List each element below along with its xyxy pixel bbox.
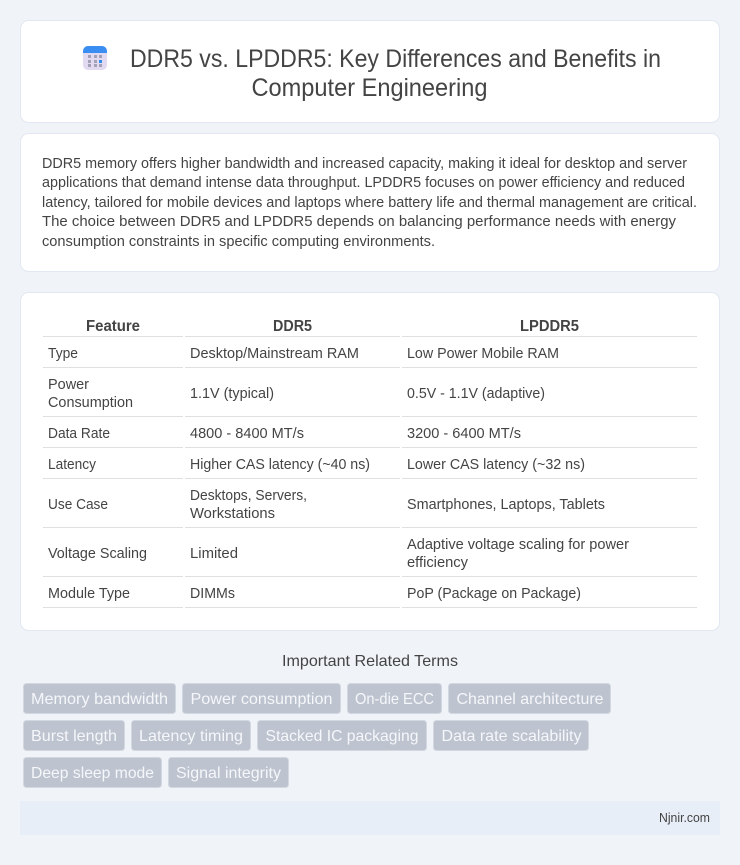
table rows: Higher CAS latency (~40 ns) bbox=[190, 457, 370, 473]
tags: related terms: Signal integrity bbox=[176, 765, 281, 782]
tags: related terms: Memory bandwidth bbox=[31, 691, 168, 708]
table header: LPDDR5 bbox=[520, 318, 579, 335]
text block: summary: applications that demand intense data throughput. LPDDR5 focuses on power efficiency and reduced bbox=[42, 175, 685, 191]
table rows: 0.5V - 1.1V (adaptive) bbox=[407, 386, 545, 402]
tags: related terms: Channel architecture bbox=[456, 691, 604, 708]
table rows: 3200 - 6400 MT/s bbox=[407, 426, 521, 442]
table rows: Type bbox=[48, 346, 78, 362]
table rows: PoP (Package on Package) bbox=[407, 586, 581, 602]
title: DDR5 vs. LPDDR5: Key Differences and Benefits in bbox=[130, 45, 661, 73]
table rows: Power bbox=[48, 377, 89, 393]
footer bbox=[20, 801, 720, 835]
text block: summary bbox=[42, 156, 697, 250]
icon: calendar bbox=[83, 46, 107, 70]
table rows: Low Power Mobile RAM bbox=[407, 346, 559, 362]
tags: related terms: On-die ECC bbox=[355, 691, 434, 708]
panel: comparison table bbox=[20, 292, 720, 630]
text block: summary: latency, tailored for mobile devices and laptops where battery life and thermal management are critical. bbox=[42, 195, 697, 211]
table rows: 4800 - 8400 MT/s bbox=[190, 426, 304, 442]
text block: summary: DDR5 memory offers higher bandwidth and increased capacity, making it ideal for desktop and server bbox=[42, 156, 687, 172]
table rows: efficiency bbox=[407, 555, 469, 571]
table rows: Module Type bbox=[48, 586, 130, 602]
panel: header bbox=[20, 20, 720, 122]
tags: related terms bbox=[24, 684, 610, 788]
table rows: Use Case bbox=[48, 497, 108, 513]
tags: related terms: Data rate scalability bbox=[442, 728, 582, 745]
table rows: Workstations bbox=[190, 506, 275, 522]
footer: Njnir.com bbox=[659, 811, 710, 825]
table rows: Limited bbox=[190, 546, 238, 562]
table header: Feature bbox=[86, 318, 140, 335]
table rows: DIMMs bbox=[190, 586, 235, 602]
table rows: Voltage Scaling bbox=[48, 546, 147, 562]
table header: DDR5 bbox=[273, 318, 312, 335]
title bbox=[130, 45, 661, 102]
tags: related terms: Latency timing bbox=[139, 728, 243, 745]
text block: summary: The choice between DDR5 and LPDDR5 depends on balancing performance needs with energy bbox=[42, 214, 677, 230]
table rows: Desktop/Mainstream RAM bbox=[190, 346, 359, 362]
table rows: 1.1V (typical) bbox=[190, 386, 274, 402]
table rows: Smartphones, Laptops, Tablets bbox=[407, 497, 605, 513]
title: Computer Engineering bbox=[252, 74, 488, 102]
table header bbox=[86, 318, 579, 335]
tags: related terms: Stacked IC packaging bbox=[266, 728, 418, 745]
tags: related terms: Power consumption bbox=[190, 691, 332, 708]
text block: summary: consumption constraints in specific computing environments. bbox=[42, 234, 435, 250]
tags: related terms: Deep sleep mode bbox=[31, 765, 154, 782]
tags: related terms: Burst length bbox=[31, 728, 117, 745]
heading: related terms: Important Related Terms bbox=[282, 653, 458, 670]
table rows: Consumption bbox=[48, 395, 133, 411]
table rows bbox=[48, 346, 629, 602]
table rows: Data Rate bbox=[48, 426, 110, 442]
table rows: Latency bbox=[48, 457, 97, 473]
table rows: Adaptive voltage scaling for power bbox=[407, 537, 629, 553]
panel: summary bbox=[20, 134, 720, 272]
table rows: Lower CAS latency (~32 ns) bbox=[407, 457, 585, 473]
table rows: Desktops, Servers, bbox=[190, 488, 307, 504]
